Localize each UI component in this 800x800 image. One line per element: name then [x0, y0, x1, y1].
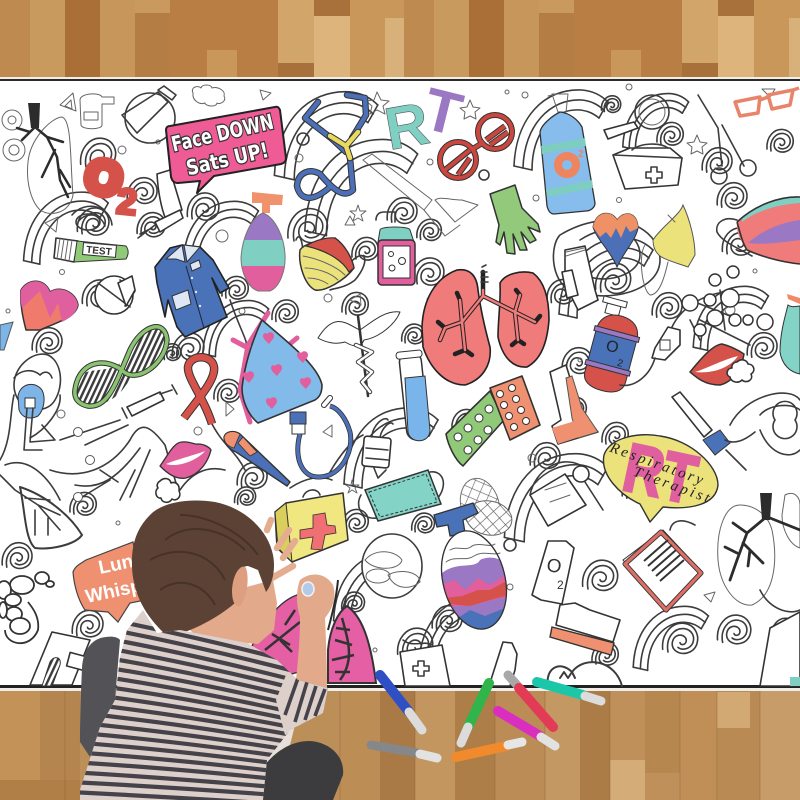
orange glasses top right: [735, 88, 799, 116]
caduceus outline: [318, 312, 400, 396]
green marker: [461, 683, 489, 743]
lung whisperer orange bubble: Whisp: [84, 575, 144, 608]
blood cells doodle right of boy: [362, 534, 422, 598]
speech bubble: Face DOWN Sats UP: [166, 107, 286, 193]
blue oxygen cylinder: 2: [578, 149, 584, 160]
yellow surgical mask: [296, 237, 365, 290]
blue oxygen cylinder: [540, 94, 595, 214]
blue hearts mask: [233, 313, 322, 423]
teal marker: [537, 682, 601, 701]
yellow oxygen mask: [641, 205, 695, 295]
magnifying glass outline: [604, 95, 669, 139]
neck and face: [180, 580, 277, 644]
right knee trousers: [263, 741, 343, 800]
coral lungs: [422, 265, 549, 385]
teal flask at right edge: [780, 294, 800, 374]
molecule balls outline: [682, 266, 773, 345]
O2 symbol red: 2: [115, 180, 139, 223]
lung whisperer orange bubble: Lun: [97, 551, 135, 579]
line-art patterned mask: [455, 474, 515, 539]
line-art right lung with black bronchi: [718, 493, 800, 612]
left knee trousers: [80, 637, 120, 757]
yellow first aid kit: [275, 490, 348, 562]
heart with orange and blue pulse: [593, 213, 638, 267]
line-art lung with black bronchi, top left: [2, 103, 73, 214]
red lips: [690, 344, 744, 385]
speech bubble: Face DOWN Sats UP: Face DOWN: [169, 110, 276, 157]
blue test vial: [396, 350, 430, 441]
test tube labelled TEST: TEST: [86, 245, 112, 258]
pink broken heart: [20, 281, 78, 330]
orange marker: [456, 742, 522, 757]
pink lungs under boy: [250, 580, 376, 683]
line-art jar: [122, 86, 176, 143]
cloud puff beside lips: [727, 360, 754, 382]
magenta marker: [498, 711, 555, 746]
line-art bottle bottom right: [760, 612, 800, 686]
oxygen tubing: [290, 398, 351, 477]
poster sheet: [0, 77, 800, 691]
yellow RT speech bubble: RT: [617, 429, 703, 519]
red marker: [508, 675, 553, 727]
ruler and bandage outline lower left: [30, 632, 91, 686]
orange pill pack: [490, 376, 540, 440]
doodle swirl background: [0, 84, 796, 670]
line-art cloud: [192, 85, 225, 106]
blue marker: [380, 675, 422, 730]
red and blue O2 tank: 2: [616, 358, 624, 370]
line-art inhaler near markers: [489, 642, 517, 686]
green glove: [490, 185, 540, 254]
lung whisperer orange bubble: [73, 542, 145, 622]
blue syringe: [672, 392, 746, 470]
stethoscope: [297, 95, 366, 198]
red and blue O2 tank: [579, 296, 648, 396]
O2 symbol red: [80, 148, 139, 223]
line-art person with blue mask left: [14, 354, 60, 450]
blood pressure cuff outline: [530, 462, 603, 526]
ruler outline: [363, 154, 478, 236]
gray marker: [371, 745, 437, 758]
pink bottle: [376, 212, 415, 285]
clipboard: [623, 521, 703, 612]
fingers on poster: [267, 520, 295, 578]
O2 canister outline: O: [545, 555, 563, 578]
orange inhaler: [550, 365, 598, 444]
ear: [232, 567, 248, 606]
red round glasses: [440, 115, 512, 178]
salmon first aid box: [550, 603, 620, 655]
red awareness ribbon: [184, 357, 214, 424]
O2 canister outline: 2: [557, 578, 564, 592]
letter T purple: T: [417, 75, 469, 149]
line-art syringe left: [122, 385, 177, 418]
line-art inhaler canister: [562, 246, 598, 310]
O2 canister outline: [532, 541, 574, 604]
line-art first aid bag bottom: [400, 640, 450, 686]
oxygen tube connector: [620, 292, 725, 385]
line-art bottle outline: [80, 94, 114, 129]
first aid box outline: [613, 144, 682, 189]
cell cluster left: [0, 572, 54, 643]
inhaler outline: [138, 170, 183, 238]
tape roll outline: [72, 206, 112, 230]
capsule pills outline: [95, 276, 135, 314]
pink lips lower left: [160, 442, 211, 478]
scissors outline: [698, 95, 756, 184]
O2 symbol red: O: [80, 148, 127, 207]
striped face mask: [716, 196, 800, 265]
purple teal pink bottle: [240, 192, 290, 292]
blue pen cap in hand: [302, 582, 314, 596]
left edge blue tab: [0, 322, 13, 350]
line-art heart doodle: [548, 662, 622, 686]
line-art luggage tag bag: [362, 419, 393, 478]
test tube labelled TEST: [54, 238, 128, 262]
speech bubble: Face DOWN Sats UP: Sats UP!: [184, 138, 271, 180]
striped shirt: [80, 610, 328, 800]
boy: [70, 501, 343, 800]
green pill pack: [446, 391, 504, 466]
teal mask: [359, 470, 443, 521]
yellow RT speech bubble: Respiratory: [607, 440, 705, 489]
pale shirt hem: [263, 725, 295, 770]
green DNA helix: [75, 327, 167, 406]
hair: [132, 501, 274, 637]
stethoscope outline right: [725, 393, 800, 455]
patterned bottle with blue cap: [433, 502, 508, 630]
line-art leaf lung lower left: [0, 475, 82, 548]
red and blue O2 tank: O: [604, 337, 620, 357]
blue lab coat: [155, 245, 229, 337]
yellow RT speech bubble: Therapist: [631, 464, 712, 507]
letter R teal: R: [380, 89, 434, 163]
thermometer: [224, 432, 290, 486]
arm and hand: [296, 575, 334, 688]
cloud puff lower: [156, 479, 180, 502]
